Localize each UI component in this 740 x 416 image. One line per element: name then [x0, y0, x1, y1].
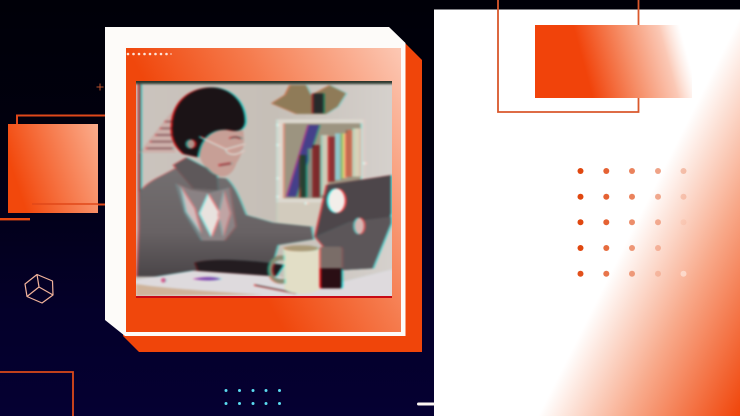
white card: [105, 27, 406, 336]
outline bottom edge over square: [32, 203, 98, 205]
white right panel: [434, 10, 740, 416]
dotted row: [127, 53, 172, 55]
left gradient square: [8, 124, 98, 213]
orange dot grid: [578, 168, 686, 277]
white pill connector: [417, 402, 435, 406]
icon: cube: [25, 274, 53, 303]
left outline square: [17, 116, 106, 204]
photo bottom border: [136, 296, 392, 298]
inner gradient panel: [126, 48, 401, 332]
left accent bar: [0, 218, 30, 220]
bottom-left outline frame: [0, 372, 73, 416]
cyan dot grid: [224, 389, 281, 405]
orange back panel: [123, 43, 422, 352]
diagonal orange sweep: [434, 10, 740, 416]
top gradient rectangle: [535, 25, 692, 98]
top outline frame: [498, 0, 638, 112]
photo: woman working at a laptop: [130, 80, 397, 300]
plus mark: [96, 84, 104, 90]
